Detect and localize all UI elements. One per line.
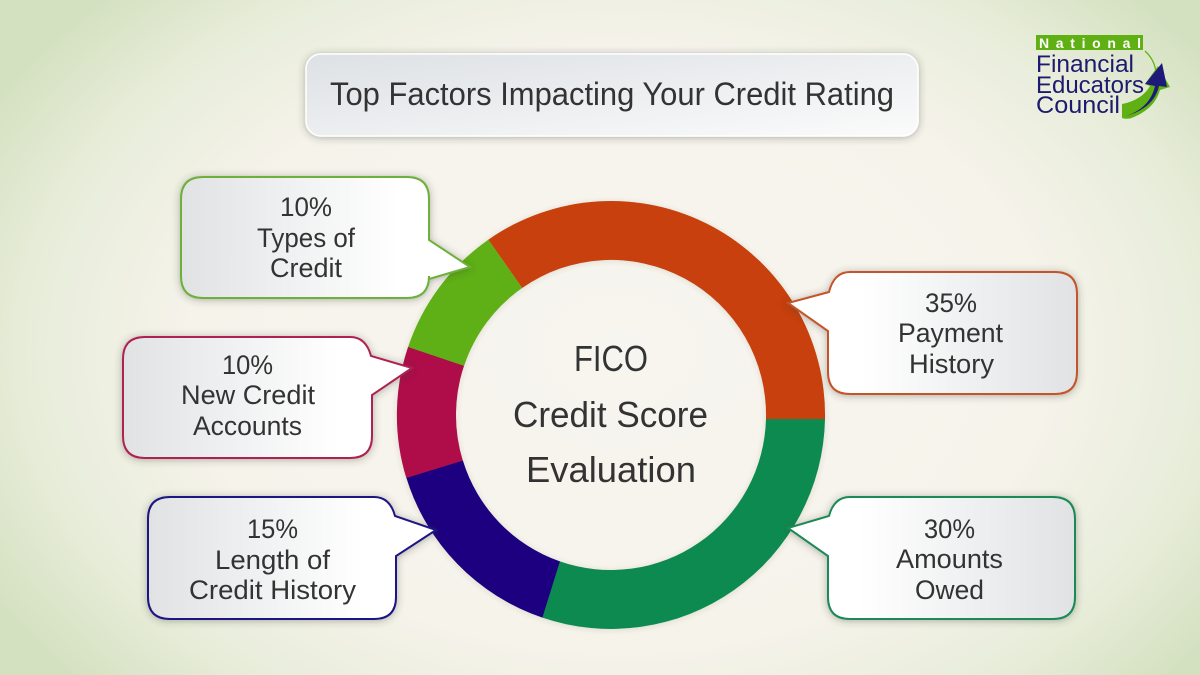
callout: new credit accounts: Accounts (193, 411, 302, 441)
callout: length of credit history: Length of (215, 545, 331, 575)
logo wordmark: Financial (1036, 51, 1134, 78)
callout: amounts owed: Owed (915, 575, 984, 605)
callout: payment history: Payment (898, 318, 1003, 348)
callout: payment history: History (909, 349, 994, 379)
title panel (306, 54, 918, 136)
callout: types of credit: Types of (257, 223, 355, 253)
title: Top Factors Impacting Your Credit Rating (330, 76, 894, 112)
logo: National Financial Educators Council: National (1039, 35, 1141, 51)
callout: amounts owed: Amounts (896, 544, 1003, 574)
segment: types of credit 10% (408, 240, 522, 366)
logo banner (1036, 35, 1143, 50)
segment: length of credit history 15% (406, 460, 560, 618)
segment: new credit accounts 10% (397, 347, 464, 478)
callout: payment history (788, 272, 1077, 394)
logo wordmark: Educators (1036, 72, 1144, 99)
callout: new credit accounts: New Credit (181, 380, 315, 410)
center label: FICO (574, 338, 648, 379)
callout: types of credit: 10% (280, 192, 332, 222)
segment: payment history 35% (488, 201, 825, 419)
callout: types of credit: Credit (270, 253, 342, 283)
logo wordmark (1036, 51, 1144, 119)
logo: National Financial Educators Council (1036, 35, 1170, 119)
callout: types of credit (181, 177, 470, 298)
donut chart (397, 201, 825, 629)
center label: Credit Score (513, 394, 708, 435)
callout: length of credit history: 15% (247, 514, 298, 544)
logo wordmark: Council (1036, 92, 1120, 119)
callout: new credit accounts: 10% (222, 350, 273, 380)
center label (513, 338, 708, 490)
callout: new credit accounts (123, 337, 412, 458)
callout: length of credit history (148, 497, 436, 619)
segment: amounts owed 30% (542, 419, 825, 629)
callout: payment history: 35% (925, 288, 977, 318)
callout: amounts owed (788, 497, 1075, 619)
callout: length of credit history: Credit History (189, 575, 357, 605)
callout: amounts owed: 30% (924, 514, 975, 544)
center label: Evaluation (526, 449, 696, 490)
logo arc and arrow (1122, 51, 1170, 119)
